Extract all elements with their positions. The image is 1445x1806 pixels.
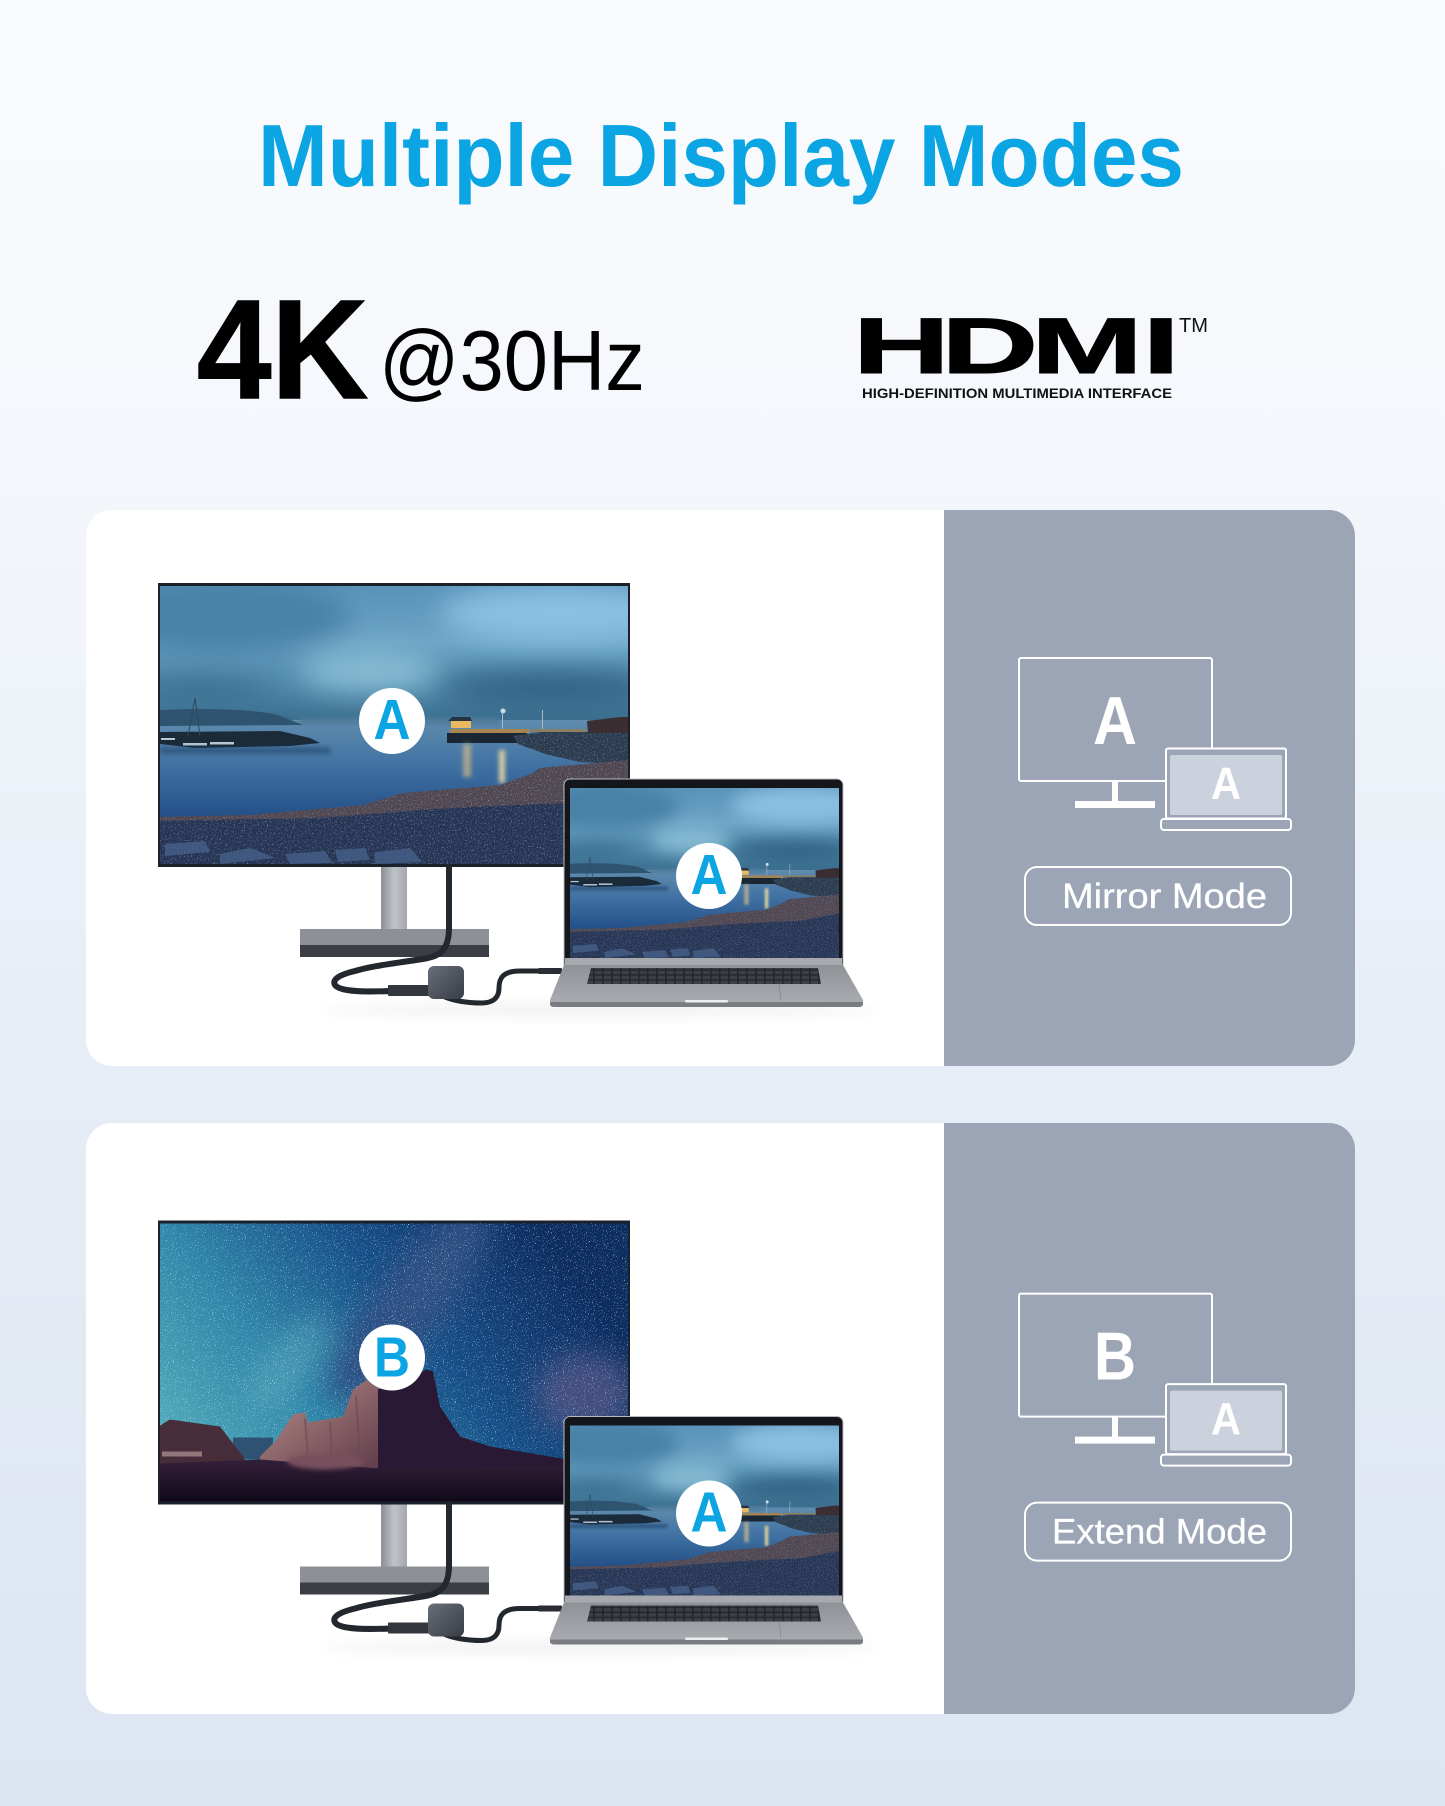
label circle A on laptop: A	[690, 843, 728, 907]
label: Extend Mode: Extend Mode	[1052, 1513, 1267, 1552]
icon monitor: B	[1094, 1319, 1136, 1395]
HDMI cable	[334, 867, 449, 991]
HDMI wordmark: HDMI	[853, 302, 1180, 390]
card background	[86, 510, 1355, 1066]
label circle B on monitor: B	[374, 1326, 410, 1390]
HDMI cable	[334, 1504, 449, 1629]
label circle A on monitor	[359, 688, 425, 754]
monitor B	[158, 1188, 635, 1504]
shadow	[320, 1003, 880, 1017]
icon laptop	[1161, 748, 1291, 830]
USB-C cable	[445, 971, 540, 1003]
panel: mirror mode	[86, 510, 1355, 1066]
monitor stand	[300, 1502, 489, 1594]
label circle A on laptop: A	[690, 1480, 728, 1544]
monitor A	[90, 576, 680, 867]
laptop	[530, 1416, 869, 1644]
label: Extend Mode	[1025, 1503, 1291, 1561]
icon laptop: A	[1211, 1394, 1241, 1445]
resolution badge: 4K @30Hz	[197, 270, 645, 428]
panel: extend mode	[86, 1123, 1355, 1714]
trademark: TM	[1179, 315, 1208, 337]
HDMI plug	[388, 985, 430, 996]
USB-C plug	[538, 968, 562, 974]
USB-C cable	[445, 1608, 540, 1640]
HDMI tagline: HIGH-DEFINITION MULTIMEDIA INTERFACE	[862, 386, 1172, 401]
label: Mirror Mode: Mirror Mode	[1062, 877, 1267, 916]
device scene: mirror	[90, 576, 880, 1017]
HDMI plug	[388, 1622, 430, 1634]
label: Mirror Mode	[1025, 867, 1291, 925]
laptop	[530, 779, 869, 1007]
icon monitor	[1019, 658, 1212, 808]
hub	[428, 966, 464, 999]
title: Multiple Display Modes	[258, 106, 1184, 205]
4K: 4K	[197, 270, 368, 428]
device scene: extend	[158, 1188, 880, 1654]
@30Hz: @30Hz	[379, 314, 645, 409]
label circle A on monitor: A	[374, 688, 410, 752]
icon: extend mode diagram	[1019, 1294, 1291, 1466]
icon: mirror mode diagram	[1019, 658, 1291, 830]
icon laptop: A	[1211, 758, 1241, 809]
label circle A on laptop	[676, 843, 742, 909]
USB-C plug	[538, 1606, 562, 1612]
shadow	[320, 1640, 880, 1654]
mode panel	[944, 1123, 1355, 1714]
HDMI logo	[853, 302, 1208, 401]
label circle A on laptop	[676, 1480, 742, 1546]
icon monitor	[1019, 1294, 1212, 1444]
mode panel	[944, 510, 1355, 1066]
icon laptop	[1161, 1384, 1291, 1466]
icon monitor: A	[1093, 683, 1137, 759]
card background	[86, 1123, 1355, 1714]
monitor stand	[300, 865, 489, 957]
label circle B on monitor	[359, 1324, 425, 1390]
hub	[428, 1604, 464, 1636]
